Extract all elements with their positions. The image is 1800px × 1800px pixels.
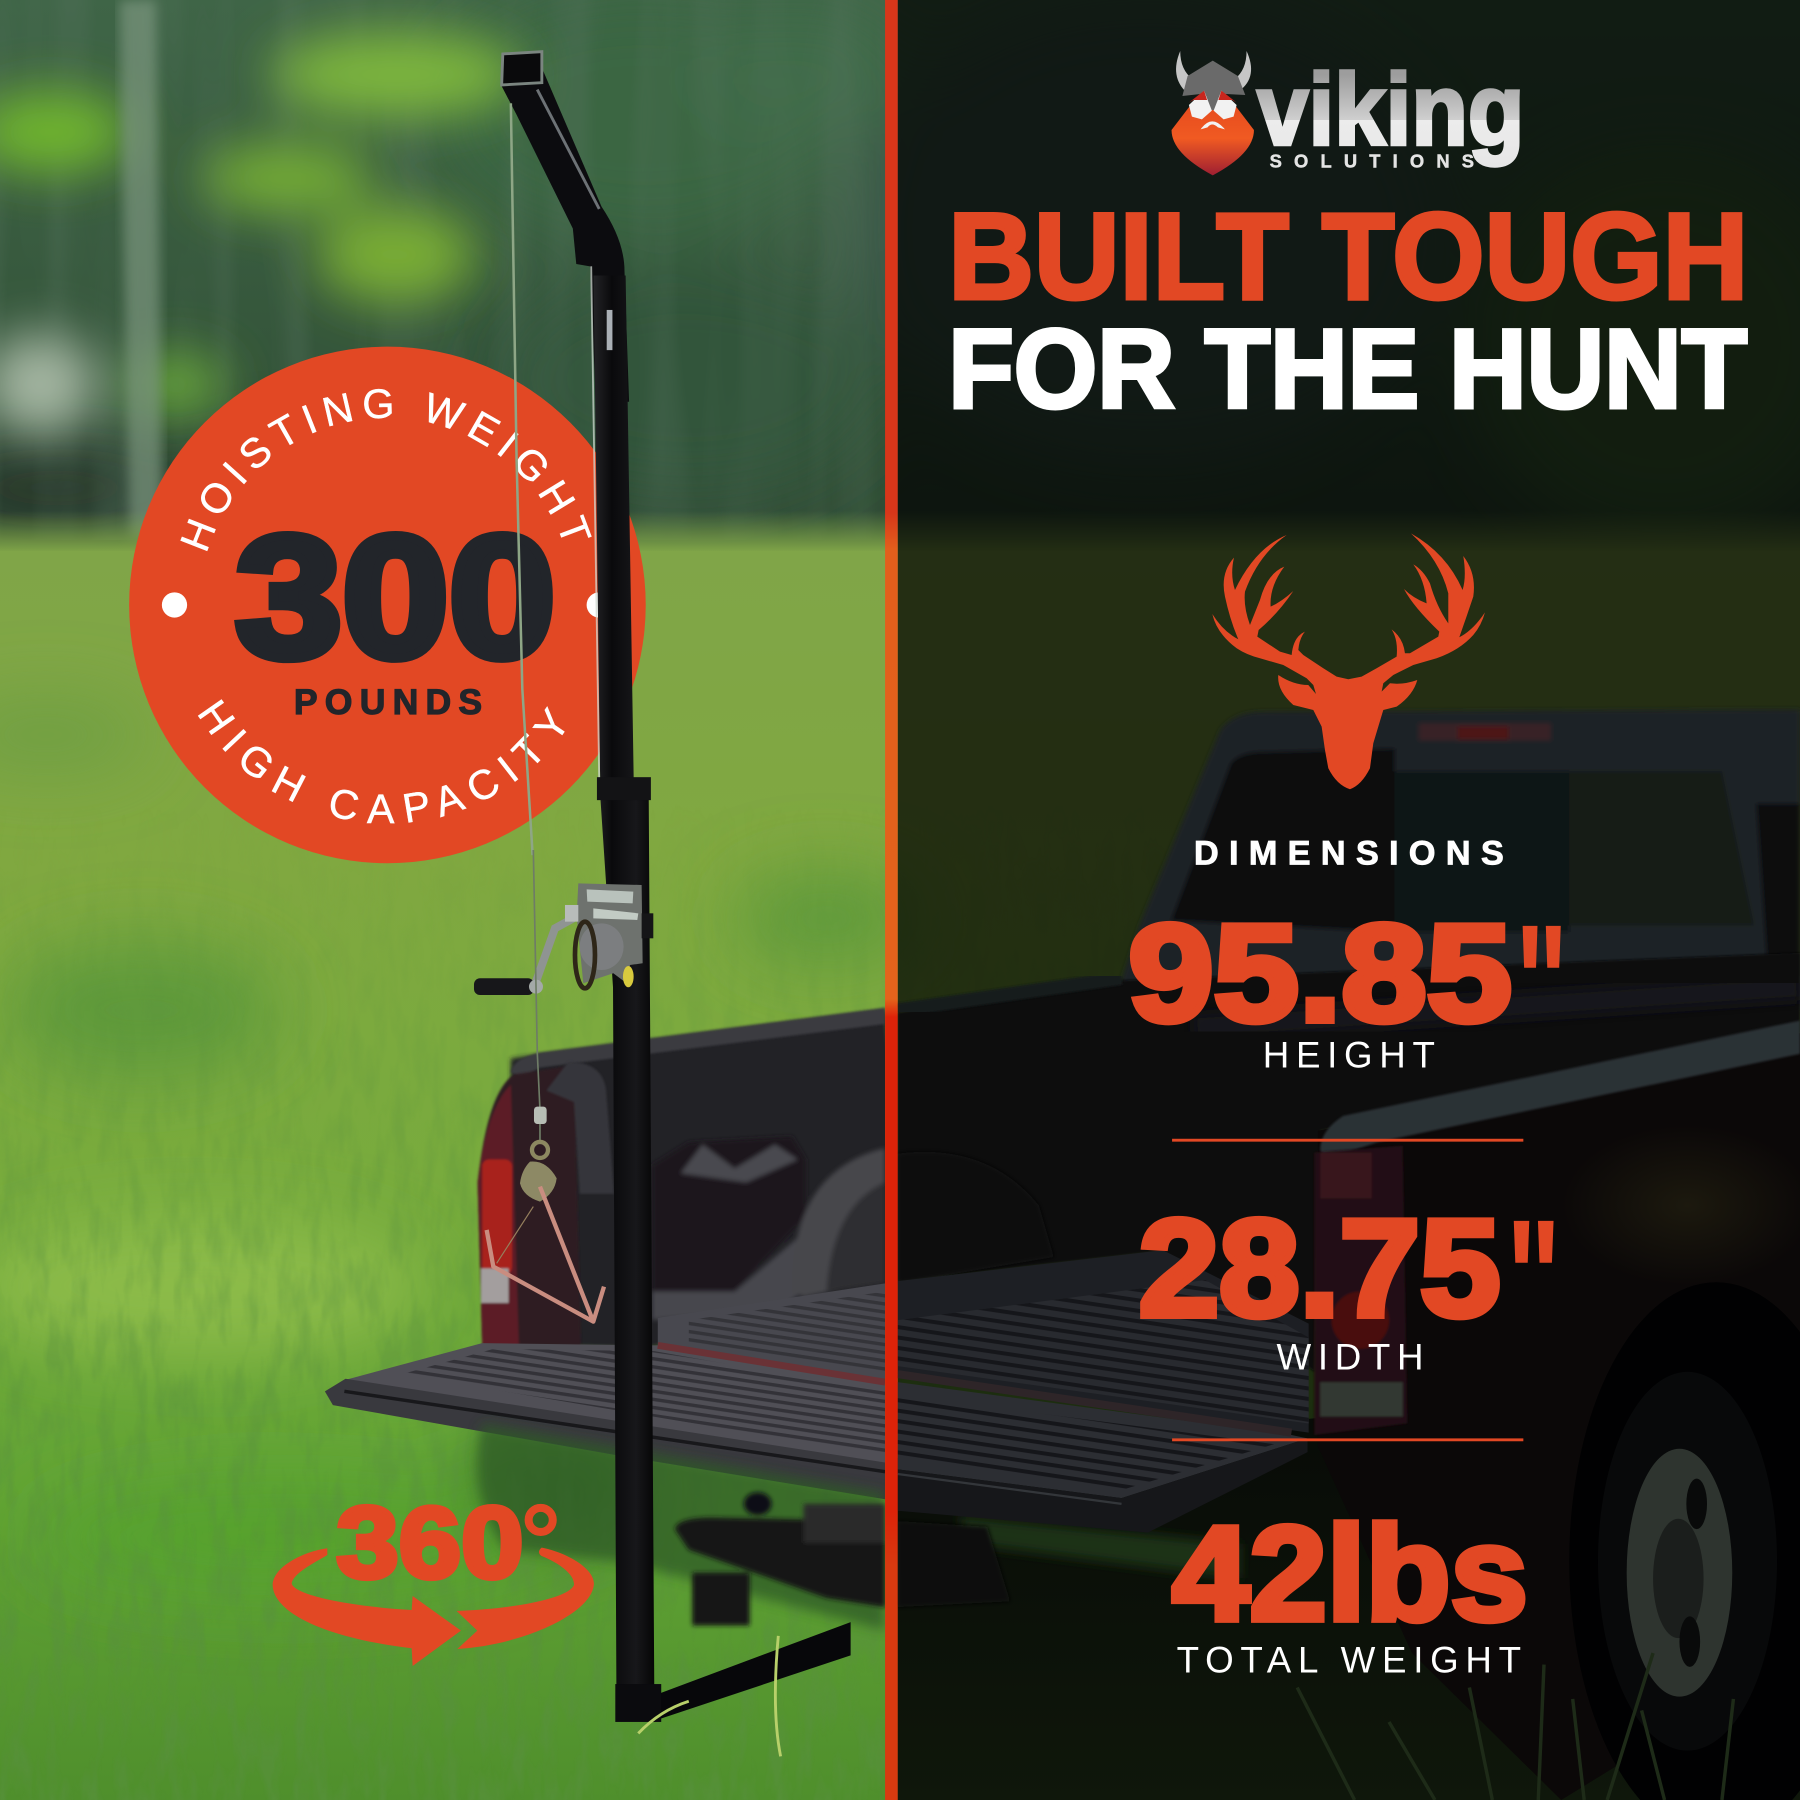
stat: total weight: 42lbs	[1172, 1499, 1528, 1649]
icon: deer head	[1212, 533, 1485, 789]
stat: height: HEIGHT	[1263, 1035, 1435, 1076]
dark overlay panel	[898, 0, 1800, 1800]
ground shadow	[477, 1423, 885, 1630]
stat: width: 28.75	[1139, 1192, 1500, 1346]
gambrel frame	[487, 1187, 604, 1322]
bed interior	[898, 953, 1800, 1372]
top arm	[502, 52, 629, 402]
divider	[1172, 1139, 1523, 1142]
stat: total weight: TOTAL WEIGHT	[1177, 1640, 1521, 1681]
cab	[1119, 709, 1800, 1010]
dimensions block	[1128, 834, 1568, 1681]
stat: width	[1139, 1184, 1561, 1378]
bed ground and lower dark	[898, 1263, 1800, 1800]
stat: height: "	[1515, 889, 1568, 1077]
grass blade over hitch	[638, 1636, 781, 1756]
solutions wordmark: SOLUTIONS	[1270, 151, 1474, 172]
hitch arm	[658, 1622, 851, 1720]
tube opening	[502, 52, 542, 85]
curved text: high capacity: HIGH CAPACITY	[198, 699, 565, 824]
winch crank	[536, 918, 573, 982]
vertical pole	[593, 276, 654, 1699]
300: 300	[235, 500, 556, 694]
bed floor	[898, 1250, 1309, 1433]
360 label: 360	[336, 1487, 523, 1599]
rotation arrows	[273, 1548, 594, 1666]
handle	[474, 978, 534, 995]
winch frame	[577, 883, 643, 983]
green glow under gate	[960, 1515, 1240, 1578]
badge circle	[129, 347, 646, 863]
degree sign	[529, 1508, 553, 1532]
bed floor	[658, 1283, 885, 1382]
red divider line	[885, 0, 898, 1800]
divider	[1172, 1438, 1523, 1441]
near side body	[1318, 1033, 1800, 1800]
pickup truck right of divider	[898, 709, 1800, 1800]
Viking Solutions logo	[1172, 51, 1524, 175]
viking head icon	[1172, 51, 1254, 175]
dimensions heading: DIMENSIONS	[1194, 834, 1504, 872]
wheel	[1569, 1282, 1800, 1800]
360 rotation icon	[273, 1487, 594, 1666]
wheel well	[898, 1152, 1054, 1283]
tailgate surface	[346, 1343, 885, 1465]
capacity badge	[129, 346, 646, 864]
pole collar	[597, 777, 651, 800]
near rail	[1320, 1021, 1800, 1159]
stat: height	[1128, 889, 1568, 1077]
tail light	[478, 1062, 614, 1345]
pickup truck left of divider	[325, 1008, 918, 1630]
for the hunt: FOR THE HUNT	[948, 306, 1747, 432]
bullet dots	[162, 592, 612, 618]
tailgate lip	[325, 1379, 885, 1499]
grass field	[0, 511, 1800, 1800]
far rail	[898, 978, 1122, 1010]
headline	[948, 188, 1748, 432]
stat: width: WIDTH	[1277, 1337, 1423, 1378]
hoist: pole, winch, wires, hook and gambrel	[474, 52, 851, 1756]
near tail light	[1314, 1146, 1407, 1435]
lifting wire	[511, 103, 533, 855]
pounds: POUNDS	[294, 682, 482, 722]
hook body	[520, 1161, 557, 1202]
forest backdrop	[0, 0, 1800, 574]
hitch	[898, 1521, 1010, 1607]
foot	[615, 1684, 661, 1722]
bed details	[652, 1136, 885, 1320]
curved text: hoisting weight: HOISTING WEIGHT	[180, 388, 592, 552]
viking wordmark: viking	[1257, 55, 1524, 167]
pole highlights	[591, 266, 599, 781]
hook cable	[533, 850, 540, 1143]
tailgate	[898, 1382, 1308, 1498]
foreground grass blades	[1297, 1653, 1733, 1800]
hitch and bumper	[675, 1492, 885, 1626]
stat: height: 95.85	[1128, 897, 1512, 1051]
bed wall and rail	[511, 1010, 918, 1349]
stat: width: "	[1506, 1184, 1561, 1372]
winch, hook and gambrel	[474, 850, 653, 1322]
built tough: BUILT TOUGH	[948, 188, 1748, 325]
